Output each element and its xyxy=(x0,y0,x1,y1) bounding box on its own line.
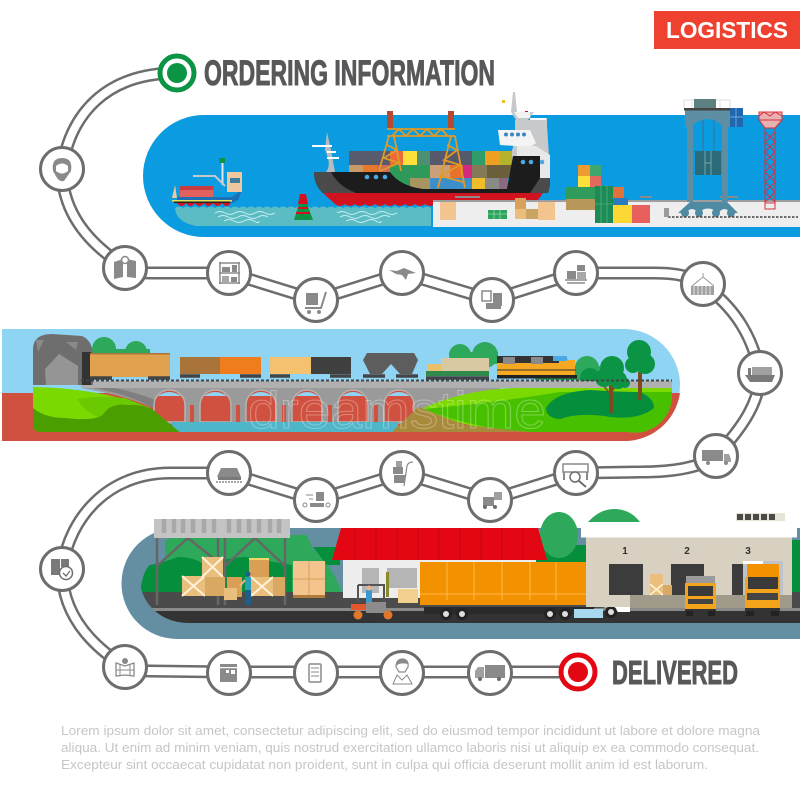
step: support headset xyxy=(40,148,84,190)
step: checklist xyxy=(294,652,338,694)
body text: aliqua. Ut enim ad minim veniam, quis nostrud exercitation ullamco laboris nisi ut aliquip ex ea commodo consequat. xyxy=(61,740,759,755)
river xyxy=(172,422,398,432)
semi truck xyxy=(420,562,630,620)
bridge xyxy=(81,382,500,424)
left hill xyxy=(33,387,182,434)
red waterline xyxy=(323,193,543,206)
panel: sea port xyxy=(143,92,800,237)
badge: logistics: LOGISTICS xyxy=(666,17,788,43)
badge: logistics xyxy=(654,11,800,49)
route track xyxy=(62,73,760,672)
step: air freight xyxy=(380,252,424,294)
warehouse building xyxy=(332,528,547,603)
rail track xyxy=(81,380,672,382)
truck at dock 3 xyxy=(743,561,783,616)
heading: ordering information: ORDERING INFORMATION xyxy=(204,54,495,93)
buoy xyxy=(294,194,313,220)
right meadow xyxy=(392,388,680,434)
pier slots xyxy=(190,405,378,422)
radar mast xyxy=(511,92,534,120)
quay xyxy=(433,201,800,227)
start marker xyxy=(160,56,194,90)
step: support agent xyxy=(380,652,424,694)
yard ground xyxy=(130,592,800,608)
step: pallet xyxy=(554,252,598,294)
background trees xyxy=(92,337,600,388)
step: forklift xyxy=(468,478,512,522)
cargo ship xyxy=(312,92,550,206)
step: conveyor xyxy=(294,478,338,522)
rail line on quay xyxy=(664,208,798,217)
body text: Excepteur sint occaecat cupidatat non proident, sunt in culpa qui officia deserunt mollit anim id est laborum. xyxy=(61,757,708,772)
cargo boxes on quay xyxy=(440,198,555,220)
water ripples xyxy=(215,212,397,222)
freight train xyxy=(90,353,577,378)
step: locomotive xyxy=(208,452,250,494)
panel: railway bridge xyxy=(2,329,680,441)
crates xyxy=(182,557,325,600)
step: map location xyxy=(104,646,146,688)
truck at dock 2 xyxy=(685,576,716,616)
step: warehouse search xyxy=(554,452,598,494)
bridge arches xyxy=(154,390,414,422)
green tree tops xyxy=(540,509,640,558)
forklift xyxy=(351,585,392,620)
containers xyxy=(349,151,390,165)
gantry crane xyxy=(678,99,743,217)
lattice tower xyxy=(759,112,782,209)
step: cargo ship xyxy=(738,352,782,394)
step: parcel trolley xyxy=(294,278,338,322)
tunnel rock xyxy=(33,334,93,385)
trees xyxy=(595,340,655,413)
road xyxy=(155,611,800,623)
deck fittings on quay xyxy=(455,197,738,199)
dark green trees xyxy=(140,557,292,592)
container stacks xyxy=(566,165,650,223)
step: storage shelf xyxy=(208,252,250,294)
depot building: 2 xyxy=(684,546,690,557)
sea xyxy=(175,206,431,226)
heading: delivered: DELIVERED xyxy=(612,654,738,691)
step: hand truck xyxy=(380,452,424,494)
step: delivery truck xyxy=(694,434,738,478)
small cargo boat xyxy=(172,158,242,206)
step: online order xyxy=(208,652,250,694)
step: delivery van xyxy=(468,652,512,694)
step: hoisted container xyxy=(682,262,724,306)
depot building: 1 xyxy=(622,546,628,557)
body text: Lorem ipsum dolor sit amet, consectetur adipiscing elit, sed do eiusmod tempor incididunt ut labore et dolore magna xyxy=(61,723,761,738)
step: route map xyxy=(104,246,146,290)
worker xyxy=(240,572,251,605)
depot building xyxy=(581,513,797,608)
step: documents and boxes xyxy=(470,278,514,322)
ship crane gantry xyxy=(379,111,465,188)
step: parcel confirmed xyxy=(40,548,84,590)
end marker xyxy=(561,655,595,689)
panel: warehouse xyxy=(122,509,800,639)
arch sky caps xyxy=(158,392,410,396)
body text xyxy=(61,723,761,772)
rear mast xyxy=(325,132,335,172)
light green trees xyxy=(165,530,342,592)
hull xyxy=(314,156,550,193)
depot building: 3 xyxy=(745,546,751,557)
canopy shed xyxy=(154,519,290,605)
watermark: dreamstime xyxy=(248,382,546,440)
superstructure xyxy=(506,118,550,172)
